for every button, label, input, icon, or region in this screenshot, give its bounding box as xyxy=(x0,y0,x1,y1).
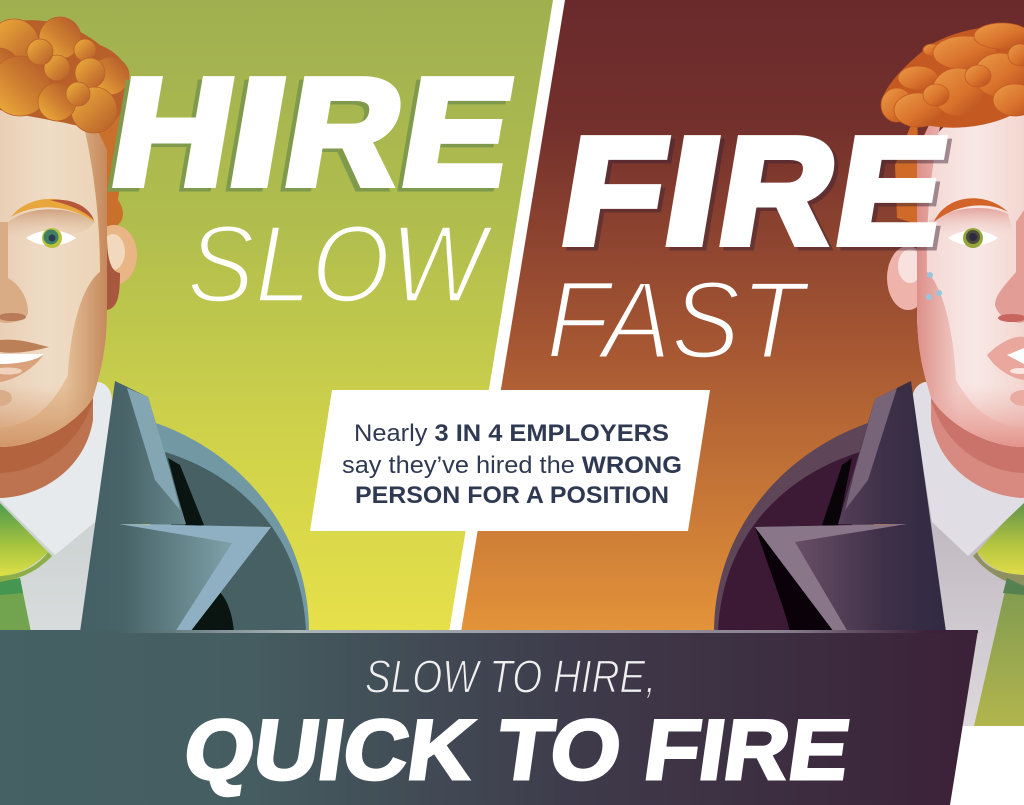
headline: FIRE xyxy=(551,107,962,279)
HIRE shadow: I xyxy=(213,51,294,220)
right man lower black shadow xyxy=(755,527,835,632)
left man hair base xyxy=(0,20,129,128)
HIRE shadow: E xyxy=(386,51,519,220)
left man shirt xyxy=(0,400,120,632)
headline: SLOW: SLOW xyxy=(187,203,494,326)
callout line 1: Nearly 3 IN 4 EMPLOYERS xyxy=(354,420,669,447)
FIRE shadow xyxy=(555,110,962,279)
bottom right white corner xyxy=(940,726,1024,805)
FIRE shadow: I xyxy=(657,110,737,279)
left man jacket lapel xyxy=(80,381,190,632)
left man eye xyxy=(26,228,76,248)
right man side shading xyxy=(917,118,1024,447)
left man side shading xyxy=(0,118,107,447)
FIRE shadow: R xyxy=(712,110,853,279)
left man lapel highlight xyxy=(127,388,180,510)
FIRE letters xyxy=(551,107,958,276)
HIRE shadow xyxy=(96,51,519,220)
right man eye xyxy=(948,228,998,248)
right man jacket shoulder xyxy=(714,421,874,632)
HIRE letters xyxy=(101,48,524,217)
right man head xyxy=(917,105,1024,447)
callout line 2: say they’ve hired the WRONG xyxy=(342,452,682,479)
FIRE letters: R xyxy=(708,107,849,276)
banner shape xyxy=(0,630,978,805)
right man frowning mouth xyxy=(987,337,1024,406)
right man lapel highlight xyxy=(845,388,897,510)
left man neck xyxy=(0,378,93,498)
callout: 3 in 4 employers xyxy=(310,390,710,531)
HIRE shadow: H xyxy=(96,51,241,220)
left man tie xyxy=(0,503,52,632)
left man hair side xyxy=(95,90,128,228)
FIRE shadow: E xyxy=(829,110,962,279)
FIRE letters: E xyxy=(825,107,958,276)
right man hair side xyxy=(895,110,920,225)
right man: worried fire xyxy=(714,23,1024,726)
left man curls xyxy=(0,17,129,133)
right man collar xyxy=(912,382,1024,556)
HIRE letters: H xyxy=(101,48,246,217)
left man ear xyxy=(91,225,137,310)
left man collar xyxy=(0,382,112,555)
right man eyebrow xyxy=(934,198,1008,222)
HIRE letters: I xyxy=(218,48,299,217)
left man eyebrow shade xyxy=(50,200,94,220)
left man head xyxy=(0,105,107,447)
callout box xyxy=(310,390,710,531)
left man jacket shoulder xyxy=(150,421,309,632)
right background panel xyxy=(461,0,1024,632)
right man hair xyxy=(881,23,1024,128)
headline: HIRE xyxy=(96,48,524,220)
left man hair xyxy=(0,17,129,133)
callout line 3: PERSON FOR A POSITION xyxy=(355,482,669,509)
HIRE letters: E xyxy=(391,48,524,217)
left man brow shadow xyxy=(8,209,95,238)
FIRE letters: I xyxy=(653,107,733,276)
right man black lapel shadow xyxy=(822,458,852,528)
right man neck xyxy=(931,378,1024,498)
left man jacket inner xyxy=(165,452,306,632)
left man lower black shadow xyxy=(190,527,271,632)
left man: smiling hire xyxy=(0,17,309,632)
right man lower lapel highlight xyxy=(755,524,907,632)
right man shirt xyxy=(905,400,1024,726)
left man nose xyxy=(0,222,28,323)
left man neck shadow xyxy=(0,378,93,473)
right man ear xyxy=(887,246,929,310)
right man lower lapel xyxy=(755,524,946,632)
right man tears xyxy=(926,272,942,300)
HIRE shadow: R xyxy=(269,51,410,220)
banner line 1: SLOW TO HIRE, xyxy=(365,650,656,702)
left man smile xyxy=(0,340,49,406)
right man neck shadow xyxy=(931,378,1024,473)
left man eyebrow xyxy=(11,199,95,222)
FIRE letters: F xyxy=(551,107,678,276)
right man hair base xyxy=(881,26,1024,128)
banner top highlight xyxy=(0,630,978,633)
FIRE shadow: F xyxy=(555,110,682,279)
left man lower lapel xyxy=(80,524,271,632)
left man black lapel shadow xyxy=(168,458,204,528)
banner line 2: QUICK TO FIRE xyxy=(178,703,856,798)
right man curls xyxy=(881,23,1024,127)
banner xyxy=(0,630,978,805)
right man nose xyxy=(995,210,1024,323)
right man tie xyxy=(973,500,1024,726)
left man chin shading xyxy=(0,385,93,447)
HIRE letters: R xyxy=(274,48,415,217)
right man chin shading xyxy=(931,385,1024,447)
left man lower lapel highlight xyxy=(119,524,271,632)
right man brow shadow xyxy=(928,208,1014,240)
headline: FAST: FAST xyxy=(546,259,810,382)
left background panel xyxy=(0,0,553,632)
right man jacket lapel xyxy=(834,381,946,632)
right man jacket inner xyxy=(718,452,860,632)
